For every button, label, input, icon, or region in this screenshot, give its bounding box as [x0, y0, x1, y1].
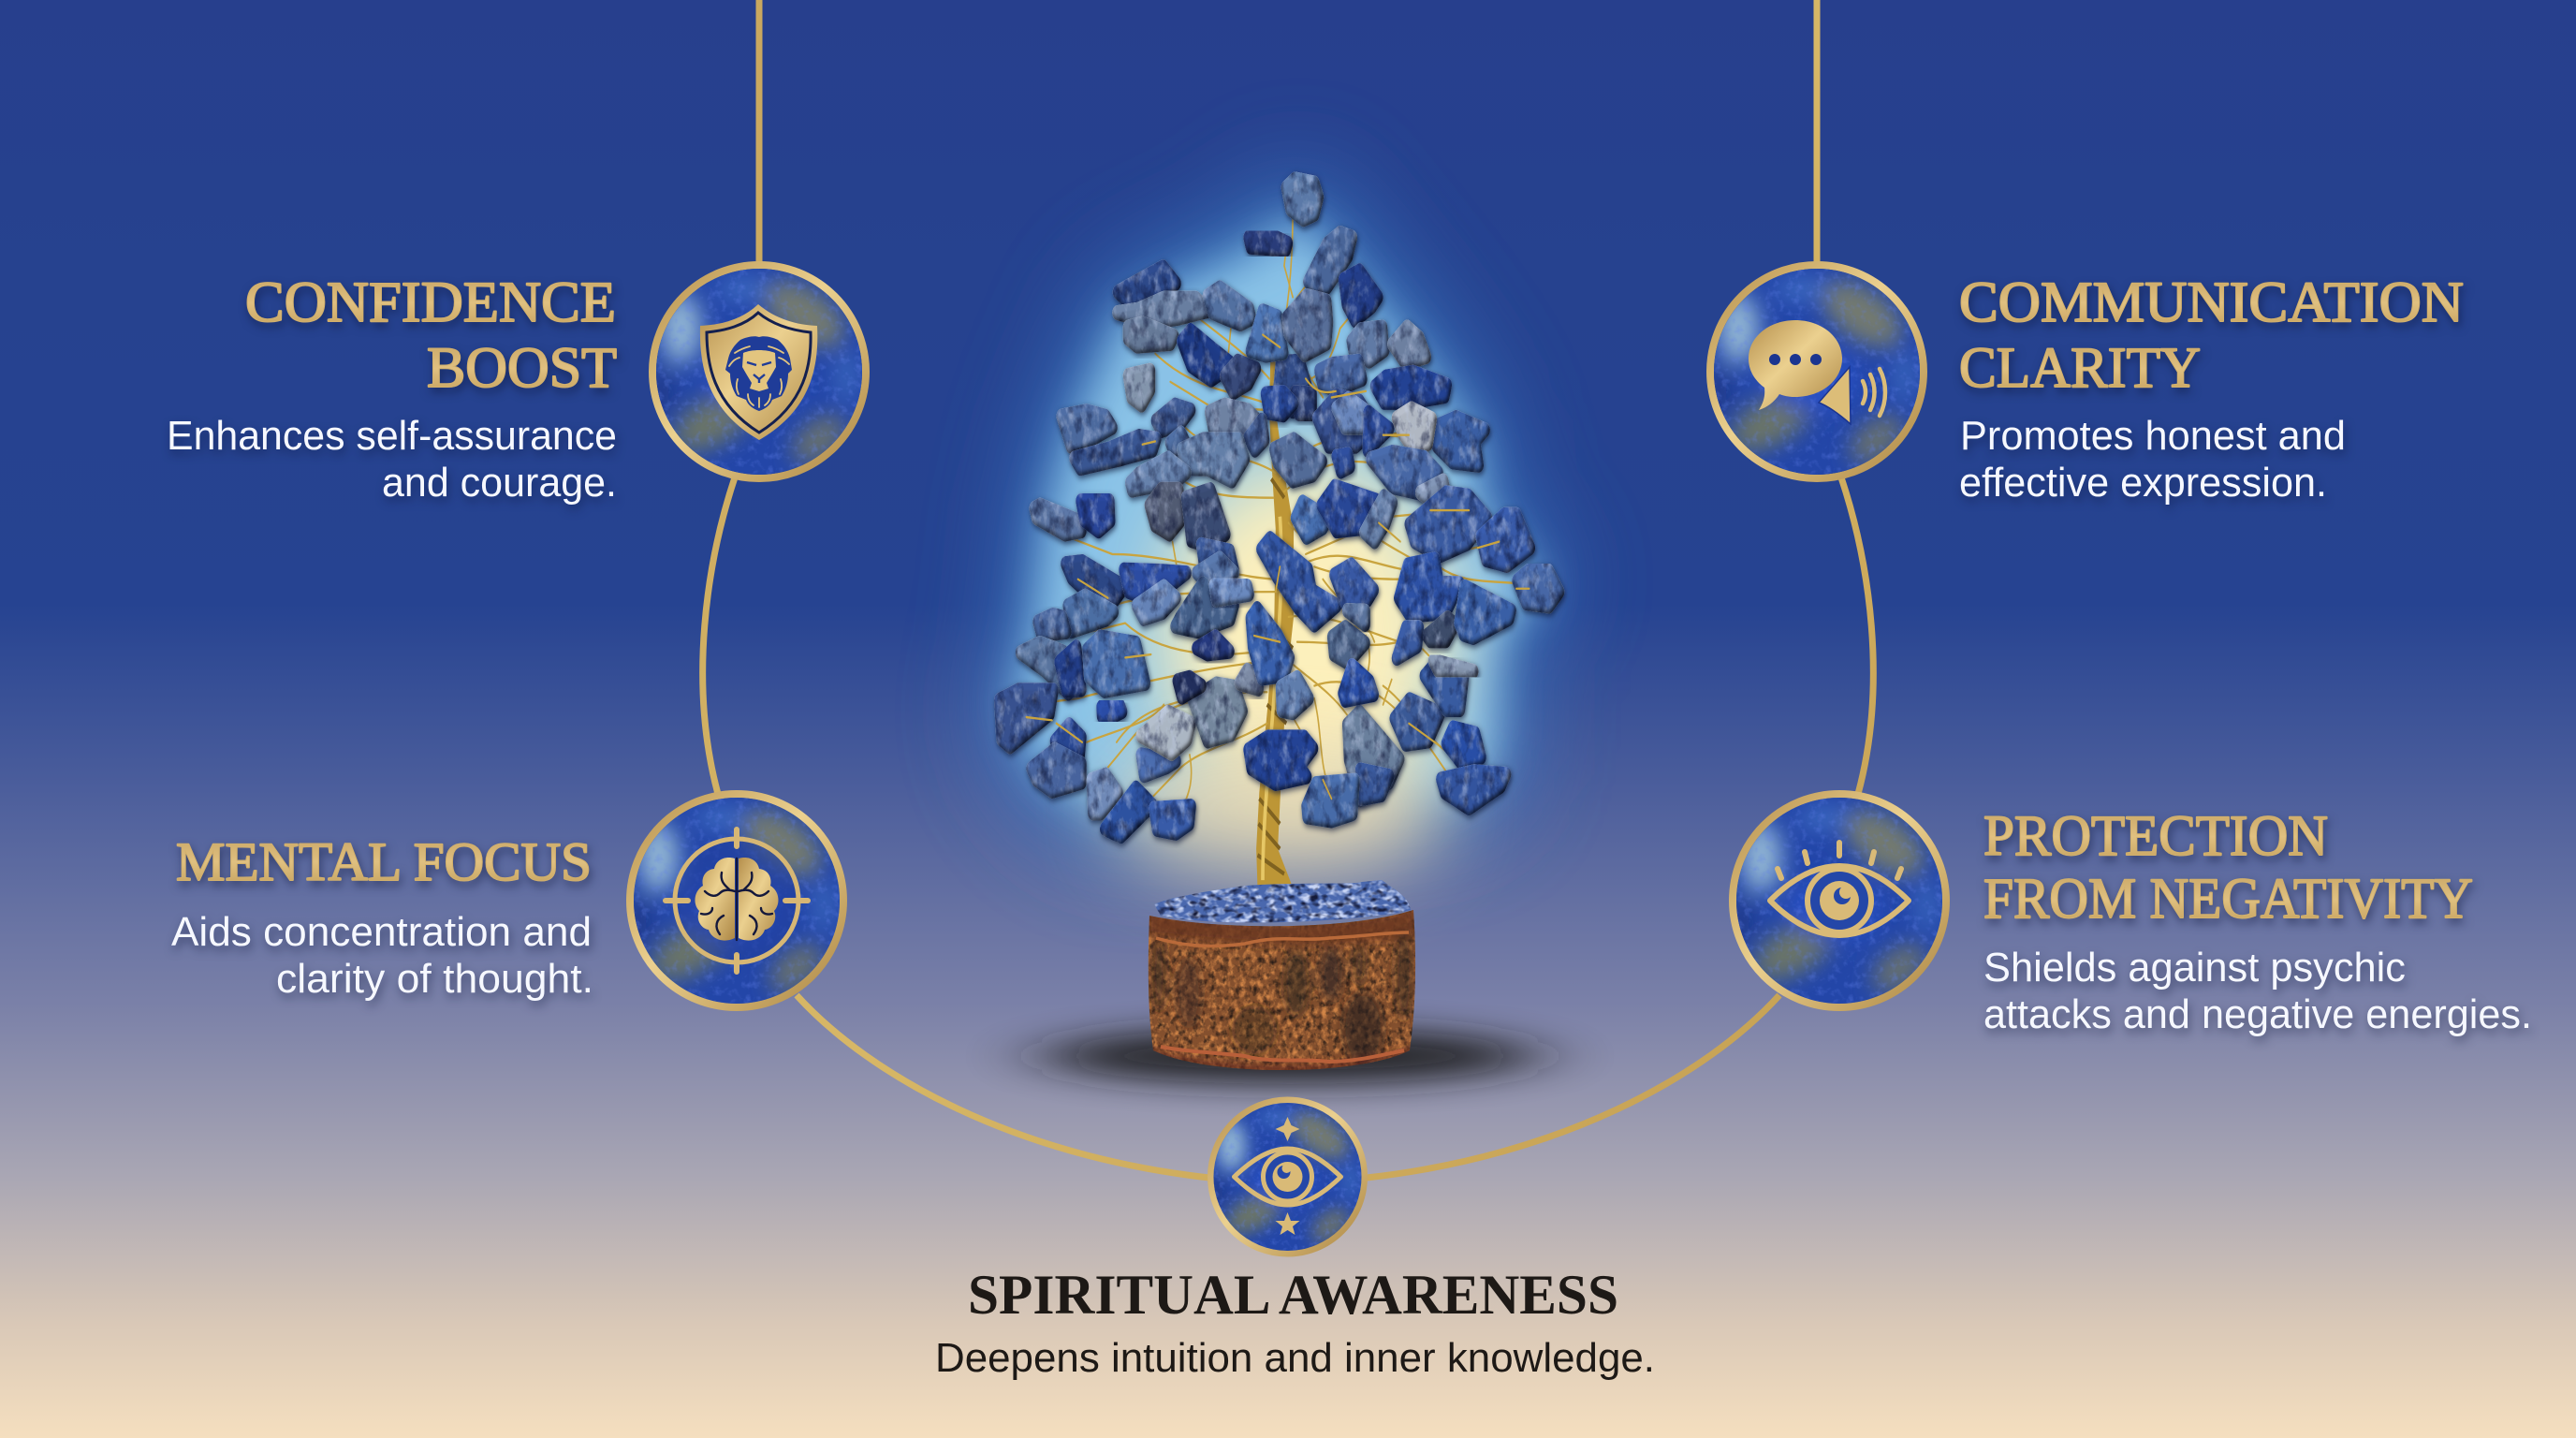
lapis chips	[1000, 180, 1559, 836]
heading: Communication Clarity: COMMUNICATION	[1959, 271, 2464, 334]
heading: Communication Clarity: CLARITY	[1959, 337, 2201, 400]
description: Protection from Negativity	[1983, 945, 2532, 1037]
arc: lower right	[1367, 995, 1779, 1178]
description: Confidence Boost	[167, 413, 617, 506]
benefit: Communication Clarity	[1710, 265, 2464, 506]
description: Protection from Negativity: attacks and negative energies.	[1983, 991, 2532, 1037]
heading: Confidence Boost: BOOST	[427, 337, 617, 400]
pot body	[1147, 903, 1418, 1077]
description: Mental Focus: clarity of thought.	[276, 956, 593, 1002]
icon: speech bubble and speaker medallion	[1710, 265, 1924, 478]
gold connecting arc	[703, 0, 1873, 1178]
wire highlights over chips	[1026, 335, 1530, 799]
description: Confidence Boost: Enhances self-assurance	[167, 413, 617, 459]
description: Communication Clarity: Promotes honest and	[1960, 413, 2346, 459]
benefit: Spiritual Awareness	[935, 1100, 1655, 1381]
benefit: Protection from Negativity	[1733, 794, 2532, 1037]
arc: upper right	[1841, 477, 1873, 794]
heading: Spiritual Awareness: SPIRITUAL AWARENESS	[968, 1264, 1618, 1326]
heading: Communication Clarity	[1959, 271, 2464, 400]
ground shadow beneath tree	[1042, 1028, 1538, 1084]
line: top right drop	[1814, 0, 1820, 266]
heading: Protection from Negativity: PROTECTION	[1983, 805, 2328, 868]
description: Protection from Negativity: Shields against psychic	[1983, 945, 2406, 990]
arc: lower left	[797, 995, 1209, 1178]
wire branches	[1031, 210, 1538, 811]
line: top left drop	[756, 0, 762, 266]
rust pot with gravel	[1147, 880, 1418, 1077]
trunk	[1256, 354, 1294, 888]
description: Communication Clarity: effective expression.	[1959, 460, 2327, 506]
heading: Confidence Boost	[245, 271, 617, 400]
heading: Confidence Boost: CONFIDENCE	[245, 271, 616, 334]
heading: Protection from Negativity: FROM NEGATIVITY	[1983, 868, 2473, 931]
icon: third eye medallion	[1210, 1100, 1365, 1254]
icon: lion shield medallion	[652, 265, 866, 478]
lapis gemstone tree	[1000, 180, 1559, 888]
description: Communication Clarity	[1959, 413, 2346, 506]
description: Spiritual Awareness: Deepens intuition and inner knowledge.	[935, 1335, 1655, 1381]
arc: upper left	[703, 477, 735, 794]
benefit: Confidence Boost	[167, 265, 866, 506]
heading: Mental Focus: MENTAL FOCUS	[176, 831, 592, 892]
tree glow	[992, 166, 1563, 880]
description: Confidence Boost: and courage.	[382, 460, 617, 506]
description: Mental Focus	[171, 909, 593, 1002]
heading: Protection from Negativity	[1983, 805, 2473, 931]
icon: brain target medallion	[630, 794, 843, 1007]
pot gravel	[1154, 880, 1411, 922]
description: Mental Focus: Aids concentration and	[171, 909, 592, 955]
benefit: Mental Focus	[171, 794, 843, 1007]
icon: protective eye medallion	[1733, 794, 1946, 1007]
